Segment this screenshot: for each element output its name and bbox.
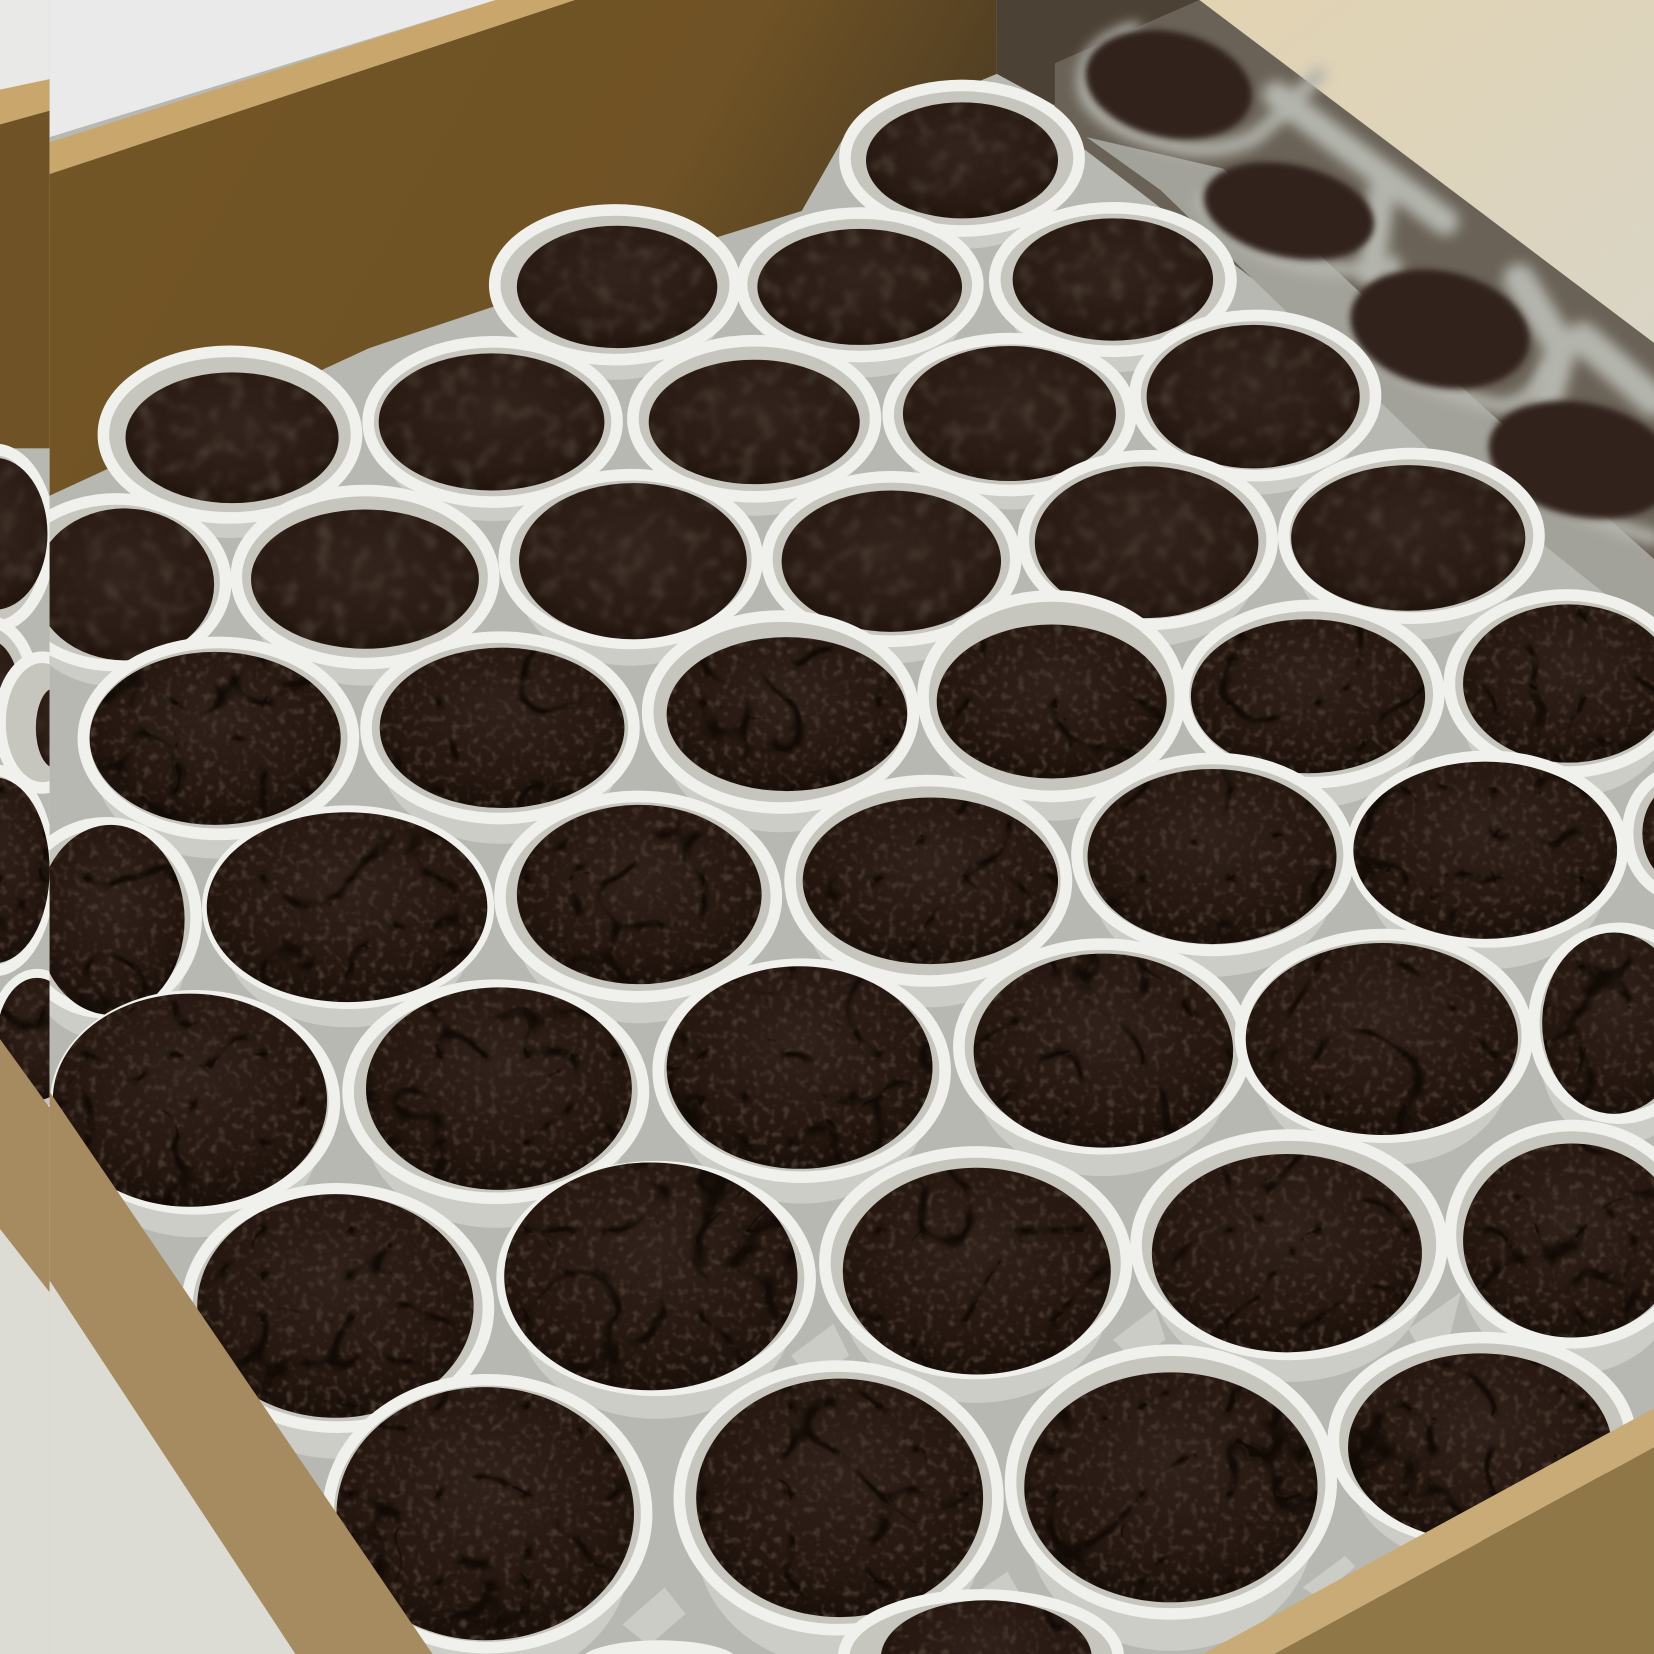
muffins row 7 bbox=[53, 928, 1654, 1237]
blurred rear muffins bbox=[1075, 15, 1654, 535]
muffins row 4 bbox=[6, 454, 1539, 687]
dark back corner bbox=[996, 0, 1207, 106]
box front rim bottom right bbox=[1203, 1408, 1654, 1654]
foil glints between cups bbox=[792, 1292, 1461, 1364]
muffins row 2 bbox=[495, 208, 1231, 380]
left offset strip of the photo bbox=[0, 0, 50, 1654]
foil highlights around rear muffins bbox=[1085, 30, 1654, 538]
muffins row 5 bbox=[83, 595, 1654, 859]
box side wall bottom left bbox=[50, 1092, 432, 1654]
box top rim bbox=[50, 0, 575, 174]
muffins row 1 bbox=[845, 85, 1079, 249]
white surface bottom left bbox=[50, 1281, 295, 1654]
box front wall bottom right bbox=[1274, 1447, 1654, 1654]
cream background at top right bbox=[1199, 0, 1654, 343]
foil band at top right bbox=[1054, 0, 1654, 559]
muffins row 9 bbox=[328, 1338, 1631, 1654]
foil glints lower bbox=[622, 1556, 1355, 1646]
muffin row 10 bbox=[580, 1595, 1118, 1654]
muffins row 6 bbox=[15, 756, 1654, 1040]
muffins row 8 bbox=[187, 1126, 1654, 1459]
box back wall bbox=[50, 0, 997, 496]
muffins row 3 bbox=[103, 315, 1376, 538]
white background at top left bbox=[50, 0, 496, 137]
